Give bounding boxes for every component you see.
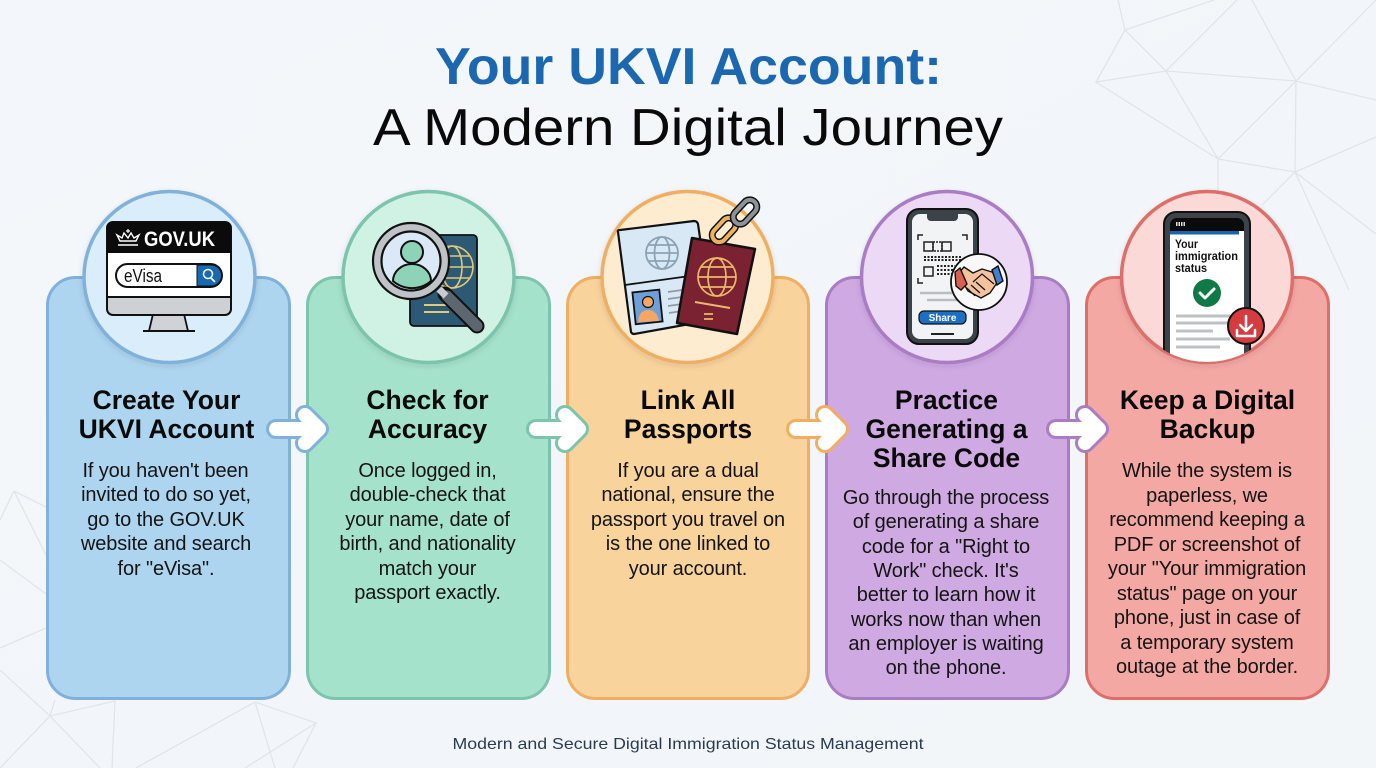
body text: go to the GOV.UK xyxy=(87,509,245,531)
heading: Practice xyxy=(895,385,998,415)
icon: phone immigration status with download: immigration xyxy=(1175,249,1238,263)
heading: Create Your xyxy=(93,385,240,415)
arrow: step 3 to 4 xyxy=(796,415,839,443)
icon: GOV.UK monitor search xyxy=(84,192,255,362)
panel: step 5 digital backup xyxy=(1086,192,1328,698)
body text: on the phone. xyxy=(886,657,1006,679)
body text: your name, date of xyxy=(345,509,510,531)
panel: step 4 share code xyxy=(826,192,1068,698)
body text: better to learn how it xyxy=(857,584,1036,606)
heading: Backup xyxy=(1160,414,1255,444)
body text: passport you travel on xyxy=(591,509,785,531)
body text: your "Your immigration xyxy=(1108,558,1306,580)
icon: phone with QR and handshake: Share xyxy=(929,313,957,324)
icon: phone immigration status with download xyxy=(1122,192,1292,372)
heading: Link All xyxy=(641,385,735,415)
heading: UKVI Account xyxy=(79,414,255,444)
heading: Passports xyxy=(624,414,752,444)
icon: passports with chain xyxy=(602,192,773,362)
body text: code for a "Right to xyxy=(862,536,1030,558)
body text: a temporary system xyxy=(1120,632,1294,654)
body text: your account. xyxy=(629,558,747,580)
body text: PDF or screenshot of xyxy=(1114,534,1301,556)
body text: invited to do so yet, xyxy=(81,484,251,506)
body text: While the system is xyxy=(1122,460,1292,482)
body text: birth, and nationality xyxy=(339,533,516,555)
panel: step 3 link passports xyxy=(568,192,808,698)
card: green xyxy=(308,278,550,698)
body text: website and search xyxy=(80,533,251,555)
body text: If you are a dual xyxy=(617,460,759,482)
body text: Go through the process xyxy=(843,487,1049,509)
body text: paperless, we xyxy=(1146,485,1268,507)
footer caption: Modern and Secure Digital Immigration Status Management xyxy=(452,736,924,753)
card: purple xyxy=(826,278,1068,698)
body text: for "eVisa". xyxy=(118,558,214,580)
body text: recommend keeping a xyxy=(1109,509,1306,531)
icon: phone immigration status with download: status xyxy=(1175,261,1207,275)
body text: double-check that xyxy=(350,484,506,506)
heading: Check for xyxy=(366,385,489,415)
card: red xyxy=(1086,278,1328,698)
icon: GOV.UK monitor search: eVisa xyxy=(124,266,163,286)
heading: Accuracy xyxy=(368,414,487,444)
icon: GOV.UK monitor search: GOV.UK xyxy=(144,227,215,251)
body text: Once logged in, xyxy=(358,460,497,482)
title: Your UKVI Account: xyxy=(435,38,942,96)
panel: step 1 create account xyxy=(48,192,290,698)
heading: Share Code xyxy=(873,443,1020,473)
body text: outage at the border. xyxy=(1116,656,1298,678)
heading: Keep a Digital xyxy=(1120,385,1295,415)
card: orange xyxy=(568,278,808,698)
body text: national, ensure the xyxy=(601,484,775,506)
body text: an employer is waiting xyxy=(848,633,1044,655)
panel: step 2 check accuracy xyxy=(308,192,550,698)
body text: If you haven't been xyxy=(82,460,249,482)
heading: Generating a xyxy=(866,414,1028,444)
body text: passport exactly. xyxy=(354,582,501,604)
icon: phone immigration status with download: Your xyxy=(1175,237,1198,251)
icon: magnifier over passport xyxy=(343,192,514,362)
body text: status" page on your xyxy=(1117,583,1298,605)
title: A Modern Digital Journey xyxy=(373,99,1003,157)
arrow: step 2 to 3 xyxy=(536,415,579,443)
body text: match your xyxy=(379,558,477,580)
body text: Work" check. It's xyxy=(873,560,1019,582)
arrow: step 1 to 2 xyxy=(276,415,319,443)
card: blue xyxy=(48,278,290,698)
arrow: step 4 to 5 xyxy=(1056,415,1099,443)
title xyxy=(373,38,1003,157)
body text: works now than when xyxy=(850,609,1041,631)
icon: phone with QR and handshake xyxy=(862,192,1032,362)
body text: phone, just in case of xyxy=(1114,607,1301,629)
body text: is the one linked to xyxy=(606,533,770,555)
body text: of generating a share xyxy=(853,511,1039,533)
